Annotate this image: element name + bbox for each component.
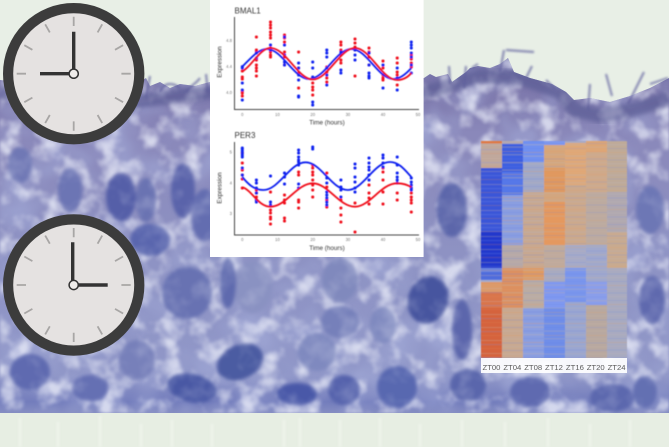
heatmap time labels: ZT12 (545, 363, 563, 372)
heatmap time labels: ZT24 (608, 363, 626, 372)
BMAL1 x tick labels: 10 (275, 112, 280, 117)
BMAL1 red fit curve (242, 48, 411, 80)
BMAL1 x tick labels: 30 (346, 112, 351, 117)
heatmap time labels: ZT16 (566, 363, 584, 372)
heatmap time labels: ZT08 (524, 363, 542, 372)
BMAL1 x tick labels: 0 (241, 112, 244, 117)
clock 1 bezel and face (8, 8, 139, 139)
apical cilia fringe (146, 50, 668, 110)
PER3 red fit curve (242, 183, 411, 207)
heatmap time labels (481, 358, 627, 373)
BMAL1 red sample dots (242, 22, 411, 96)
panel: expression line charts (210, 0, 424, 257)
BMAL1 axis titles: Expression (216, 46, 224, 78)
clock 2 centre pivot (69, 280, 78, 290)
BMAL1 x tick labels: 40 (381, 112, 386, 117)
PER3 blue fit curve (242, 162, 411, 190)
PER3 x tick labels: 0 (241, 237, 244, 242)
PER3 axis titles: Time (hours) (309, 245, 345, 252)
basal edge line (0, 404, 669, 412)
BMAL1 blue sample dots (242, 37, 411, 105)
clock 1 hour ticks (17, 17, 131, 131)
PER3 x tick labels: 20 (310, 237, 316, 242)
bottom membrane pale streaks (0, 413, 669, 447)
BMAL1 x tick labels: 50 (416, 112, 421, 117)
heatmap time labels: ZT04 (503, 363, 522, 372)
PER3 red sample dots (242, 153, 411, 232)
BMAL1 y tick labels: 4.0 (226, 90, 233, 95)
BMAL1 x tick labels (241, 112, 421, 117)
clock 2 bezel and face (8, 219, 139, 351)
chart: BMAL1 (216, 6, 421, 126)
BMAL1 y tick labels (226, 38, 233, 95)
PER3 y tick labels (230, 150, 233, 216)
PER3 x tick labels: 40 (381, 237, 386, 242)
PER3 blue sample dots (242, 147, 411, 205)
column ZT20 (586, 141, 607, 358)
PER3 y tick labels: 4 (230, 180, 233, 186)
PER3 axis titles: Expression (216, 172, 224, 204)
PER3 y tick labels: 3 (230, 211, 233, 216)
column ZT04 (502, 141, 523, 358)
BMAL1 blue fit curve (242, 49, 411, 79)
column ZT24 (607, 141, 627, 358)
clock 1 centre pivot (69, 69, 78, 78)
PER3 x tick labels: 30 (346, 237, 351, 242)
PER3 axis titles (216, 172, 345, 252)
clock 2 hour ticks (17, 228, 131, 342)
heatmap: gene expression by zeitgeber time (481, 141, 627, 373)
PER3 x tick labels: 50 (416, 237, 421, 242)
PER3 y tick labels: 5 (230, 150, 233, 154)
BMAL1 x tick labels: 20 (310, 112, 316, 117)
clock: nine o'clock (8, 8, 139, 139)
BMAL1 axis titles (216, 46, 345, 126)
PER3 x tick labels (241, 237, 421, 242)
apical dark band (0, 76, 669, 116)
column ZT12 (544, 141, 565, 358)
clock 1 hands (40, 32, 74, 74)
heatmap cell columns (481, 141, 627, 358)
BMAL1 y tick labels: 4.8 (226, 38, 233, 43)
BMAL1 axes (234, 17, 419, 110)
clock 2 hands (73, 242, 108, 285)
heatmap time labels: ZT00 (483, 363, 500, 372)
PER3 x tick labels: 10 (275, 237, 280, 242)
PER3 title: PER3 (234, 131, 256, 140)
heatmap time labels: ZT20 (587, 363, 605, 372)
column ZT00 (481, 141, 502, 358)
cell nuclei (8, 147, 665, 412)
heatmap row stripes (481, 141, 627, 358)
column ZT08 (523, 141, 544, 358)
chart: PER3 (216, 131, 421, 252)
BMAL1 y tick labels: 4.4 (226, 64, 233, 69)
column ZT16 (565, 141, 586, 358)
BMAL1 title: BMAL1 (234, 6, 261, 16)
BMAL1 axis titles: Time (hours) (309, 120, 345, 126)
PER3 axes (234, 142, 419, 235)
clock: three o'clock (8, 219, 139, 351)
